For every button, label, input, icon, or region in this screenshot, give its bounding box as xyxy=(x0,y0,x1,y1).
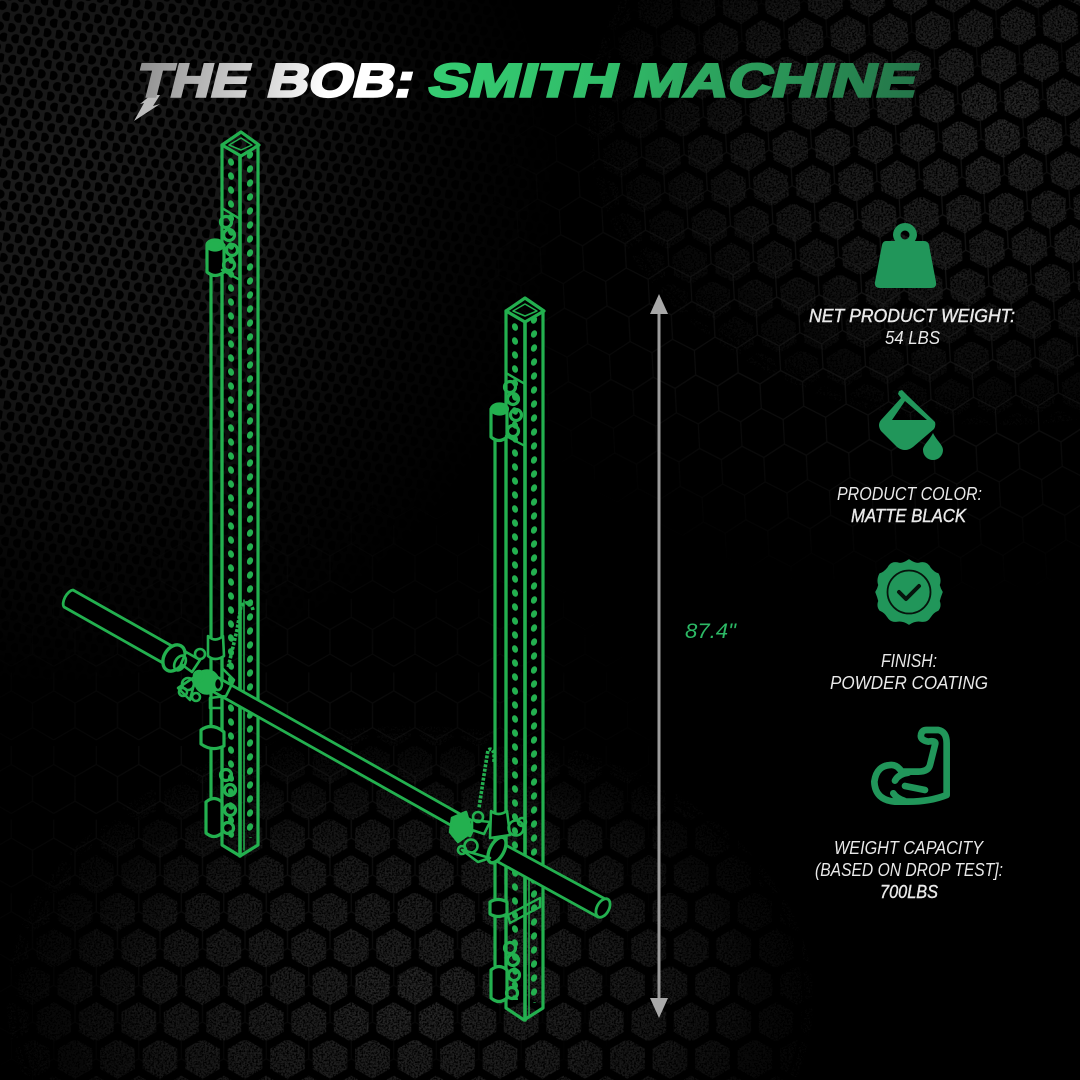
capacity label: WEIGHT CAPACITY xyxy=(834,838,985,858)
left upright column xyxy=(222,132,259,856)
icon: paint bucket xyxy=(879,390,943,460)
spec: finish xyxy=(830,560,988,693)
height label: 87.4" xyxy=(685,620,738,643)
right upright column xyxy=(506,298,544,1020)
spec: net product weight xyxy=(809,223,1015,348)
right sleeve xyxy=(491,842,608,917)
icon: kettle weight xyxy=(875,223,936,288)
title word: THE with lightning bolt: THE xyxy=(131,55,256,107)
height dimension arrow xyxy=(650,294,668,1018)
title word: BOB: BOB: xyxy=(262,55,421,107)
right carriage clamp xyxy=(450,811,526,862)
icon: flexed arm xyxy=(874,730,947,802)
color value: MATTE BLACK xyxy=(851,506,967,526)
left guide tube and sleeves xyxy=(201,208,240,836)
weight value: 54 LBS xyxy=(885,328,940,348)
right chain and hook xyxy=(479,749,494,808)
finish label: FINISH: xyxy=(881,651,937,671)
left collar xyxy=(158,641,190,675)
finish value: POWDER COATING xyxy=(830,673,988,693)
color label: PRODUCT COLOR: xyxy=(837,484,982,504)
icon: quality badge xyxy=(876,560,942,624)
title word: THE with lightning bolt xyxy=(131,55,256,121)
spec: product color xyxy=(837,390,982,526)
weight label: NET PRODUCT WEIGHT: xyxy=(809,306,1015,326)
left carriage clamp xyxy=(172,636,234,708)
right collar xyxy=(484,834,510,866)
smith machine line drawing xyxy=(63,132,613,1020)
barbell xyxy=(63,590,613,920)
left sleeve xyxy=(63,590,172,663)
left chain and hook xyxy=(228,603,253,668)
bar shaft xyxy=(205,673,476,836)
right guide tube and sleeves xyxy=(490,373,540,1002)
capacity value: 700LBS xyxy=(880,882,938,902)
capacity qualifier: (BASED ON DROP TEST]: xyxy=(815,860,1003,880)
spec: weight capacity xyxy=(815,730,1003,902)
title words: SMITH MACHINE: SMITH MACHINE xyxy=(423,55,924,107)
title xyxy=(131,55,924,121)
